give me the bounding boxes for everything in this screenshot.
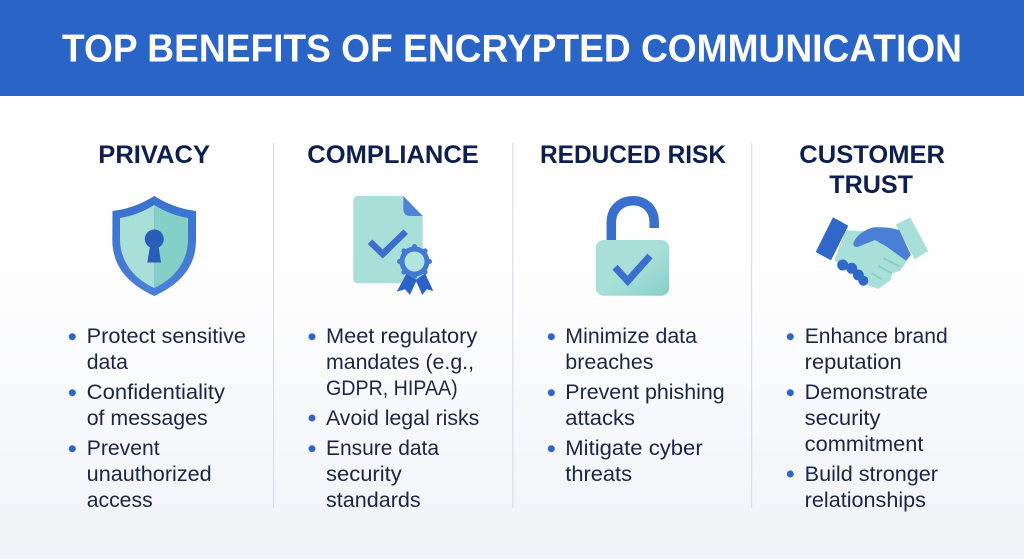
panel: compliance bbox=[307, 141, 479, 512]
icon: shield with keyhole bbox=[112, 196, 196, 296]
heading: customer trust bbox=[799, 141, 945, 199]
list: compliance benefits: security bbox=[326, 462, 402, 486]
list: reduced risk benefits: breaches bbox=[565, 350, 654, 374]
list: privacy benefits bbox=[69, 324, 246, 512]
heading: customer trust: CUSTOMER bbox=[799, 141, 945, 169]
list: privacy benefits: Prevent bbox=[87, 436, 160, 460]
list: compliance benefits bbox=[308, 324, 479, 512]
heading: privacy: PRIVACY bbox=[98, 141, 210, 169]
list: compliance benefits: Ensure data bbox=[326, 436, 439, 460]
list: reduced risk benefits: attacks bbox=[565, 406, 635, 430]
panel: privacy bbox=[69, 141, 246, 512]
list: reduced risk benefits: threats bbox=[565, 462, 632, 486]
list: privacy benefits: Protect sensitive bbox=[87, 324, 246, 348]
header banner bbox=[0, 0, 1024, 96]
list: customer trust benefits: Build stronger bbox=[805, 462, 938, 486]
heading: reduced risk: REDUCED RISK bbox=[540, 141, 726, 169]
list: customer trust benefits: Enhance brand bbox=[805, 324, 948, 348]
list: privacy benefits: of messages bbox=[87, 406, 208, 430]
list: compliance benefits: standards bbox=[326, 488, 421, 512]
list: privacy benefits: unauthorized bbox=[87, 462, 212, 486]
icon: open padlock with check bbox=[596, 201, 669, 296]
heading: customer trust: TRUST bbox=[829, 171, 913, 199]
list: customer trust benefits: reputation bbox=[805, 350, 902, 374]
list: privacy benefits: Confidentiality bbox=[87, 380, 225, 404]
icon: handshake bbox=[817, 218, 927, 288]
list: compliance benefits: mandates (e.g., bbox=[326, 350, 474, 374]
list: customer trust benefits: Demonstrate bbox=[805, 380, 928, 404]
list: compliance benefits: Avoid legal risks bbox=[326, 406, 479, 430]
heading: compliance: COMPLIANCE bbox=[307, 141, 479, 169]
list: customer trust benefits: security bbox=[805, 406, 881, 430]
icon: certified document bbox=[353, 196, 433, 295]
list: reduced risk benefits bbox=[548, 324, 725, 486]
list: privacy benefits: data bbox=[87, 350, 128, 374]
list: reduced risk benefits: Minimize data bbox=[565, 324, 697, 348]
list: reduced risk benefits: Mitigate cyber bbox=[565, 436, 703, 460]
list: customer trust benefits: commitment bbox=[805, 432, 924, 456]
list: customer trust benefits: relationships bbox=[805, 488, 926, 512]
list: customer trust benefits bbox=[787, 324, 948, 512]
panel: reduced risk bbox=[540, 141, 726, 486]
panel: customer trust bbox=[787, 141, 948, 512]
title: TOP BENEFITS OF ENCRYPTED COMMUNICATION bbox=[62, 28, 962, 70]
list: compliance benefits: GDPR, HIPAA) bbox=[326, 376, 458, 400]
list: compliance benefits: Meet regulatory bbox=[326, 324, 478, 348]
list: privacy benefits: access bbox=[87, 488, 153, 512]
list: reduced risk benefits: Prevent phishing bbox=[565, 380, 725, 404]
